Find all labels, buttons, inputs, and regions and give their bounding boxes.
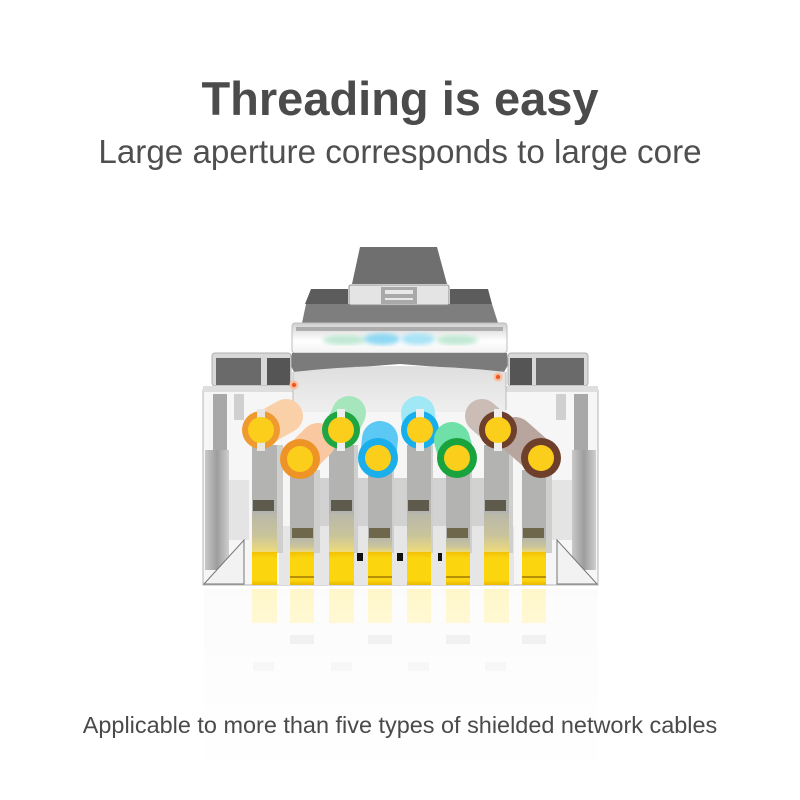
wire: green white 3 [322, 409, 360, 451]
wire: orange 2 [280, 439, 320, 479]
transparent housing [203, 366, 598, 585]
latch [302, 247, 498, 323]
side wings [212, 353, 588, 386]
subtitle: Large aperture corresponds to large core [98, 134, 702, 171]
wire: orange white 1 [242, 409, 286, 451]
metal contacts [252, 445, 552, 561]
wire: brown 8 [515, 435, 561, 478]
wire: green 6 [437, 438, 477, 478]
wire: brown white 7 [479, 409, 517, 451]
wire: blue 4 [358, 438, 398, 478]
gold contact tips [252, 552, 546, 585]
reflection [200, 589, 600, 784]
wire: blue white 5 [401, 409, 439, 451]
caption: Applicable to more than five types of shielded network cables [83, 712, 717, 738]
upper glowing band [290, 323, 508, 372]
wires [242, 409, 561, 479]
orange markers [290, 372, 502, 390]
title: Threading is easy [201, 72, 599, 125]
